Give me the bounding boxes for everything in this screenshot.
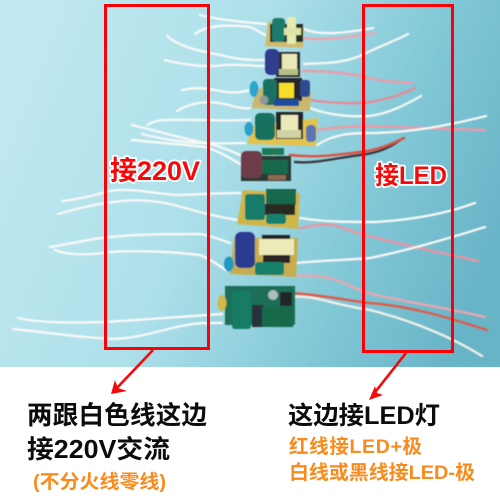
- instructions: LED side: [288, 402, 476, 484]
- instructions: LED side: 这边接LED灯: [288, 402, 440, 430]
- board 6: [237, 189, 300, 229]
- driver boards column: [218, 17, 318, 329]
- board 7: [224, 232, 298, 277]
- label: 220V: 接220V: [110, 156, 200, 186]
- board 3: [250, 78, 311, 111]
- instructions: 220V side: (不分火线零线): [33, 471, 166, 493]
- photo background: [0, 0, 500, 367]
- board 2: [265, 49, 300, 77]
- instructions: LED side: 白线或黑线接LED-极: [289, 461, 476, 484]
- arrow: 220V side: [111, 350, 153, 394]
- board 1: [265, 17, 304, 48]
- label: LED: 接LED: [375, 162, 447, 190]
- instructions: LED side: 红线接LED+极: [289, 435, 422, 458]
- board 8: [218, 286, 295, 329]
- instructions: 220V side: 两跟白色线这边: [27, 402, 207, 430]
- instructions: 220V side: 接220V交流: [27, 436, 170, 464]
- arrow: LED side: [369, 353, 406, 400]
- wires on the LED side: [290, 28, 487, 356]
- board 5: [241, 146, 291, 181]
- board 4: [244, 112, 318, 146]
- red frame: LED side: [364, 6, 452, 352]
- instructions: 220V side: [27, 402, 207, 493]
- red frame: 220V side: [106, 6, 208, 348]
- white wires on the 220V side: [13, 15, 266, 339]
